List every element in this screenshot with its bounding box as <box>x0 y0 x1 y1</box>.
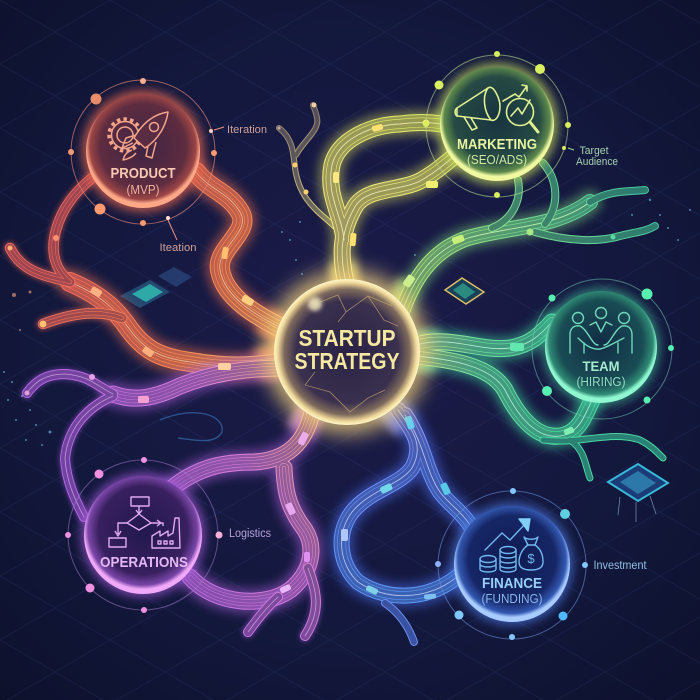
orbit: marketing <box>423 51 571 198</box>
label: product: PRODUCT <box>110 165 176 182</box>
hub highlight <box>308 297 322 311</box>
orbit: team <box>532 279 674 419</box>
chip: left <box>120 267 192 308</box>
callout: iteration lower <box>160 220 196 254</box>
label: hiring: (HIRING) <box>576 375 626 389</box>
callout: iteration right: Iteration <box>227 124 267 136</box>
node: finance <box>454 506 570 622</box>
orbit: product <box>68 78 217 226</box>
icon: coins, money bag and growth arrow <box>480 519 543 572</box>
particle clusters <box>3 188 691 446</box>
callout: target audience: Audience <box>576 156 618 168</box>
title: startup: STARTUP <box>298 325 396 351</box>
orbit: operations <box>65 457 222 613</box>
glow halos <box>81 63 660 625</box>
branch group: yellow, marketing upper <box>279 105 452 290</box>
branch group: red, product <box>10 172 285 366</box>
node: product <box>86 94 200 208</box>
callout: investment: Investment <box>594 560 647 572</box>
label: team: TEAM <box>582 358 620 374</box>
callout: logistics: Logistics <box>229 528 271 540</box>
branch group: blue, finance <box>342 410 470 642</box>
icon: gear and rocket <box>109 112 168 160</box>
label: marketing: MARKETING <box>457 136 537 153</box>
label: seo ads: (SEO/ADS) <box>467 152 527 167</box>
branch group: green-yellow, marketing lower <box>400 163 655 318</box>
node: marketing <box>440 67 554 181</box>
branch group: green, team <box>416 322 663 478</box>
chip: lower right <box>608 464 668 522</box>
hub cracks <box>305 295 398 412</box>
icon: flowchart and factory <box>109 497 180 548</box>
callout: iteration lower: Iteation <box>160 242 196 254</box>
central hub <box>274 279 420 425</box>
label: funding: (FUNDING) <box>482 591 542 606</box>
icon: three people shaking hands <box>570 308 632 353</box>
node: operations <box>84 476 202 594</box>
icon: megaphone and magnifier <box>455 85 538 132</box>
decorative blue swirl <box>160 413 222 441</box>
title: strategy: STRATEGY <box>294 348 400 374</box>
branch group: purple, operations <box>27 368 316 636</box>
callout: target audience: Target <box>580 145 608 157</box>
node: team <box>545 291 657 403</box>
chip: upper right <box>445 278 484 304</box>
label: finance: FINANCE <box>482 576 542 592</box>
orbit: finance <box>435 488 588 640</box>
label: mvp: (MVP) <box>126 182 160 197</box>
label: operations: OPERATIONS <box>100 554 188 571</box>
hub trunk flares <box>258 262 440 432</box>
icon: dollar sign: $ <box>527 551 535 566</box>
callout: target audience <box>568 145 618 168</box>
branch nodes <box>8 102 616 600</box>
